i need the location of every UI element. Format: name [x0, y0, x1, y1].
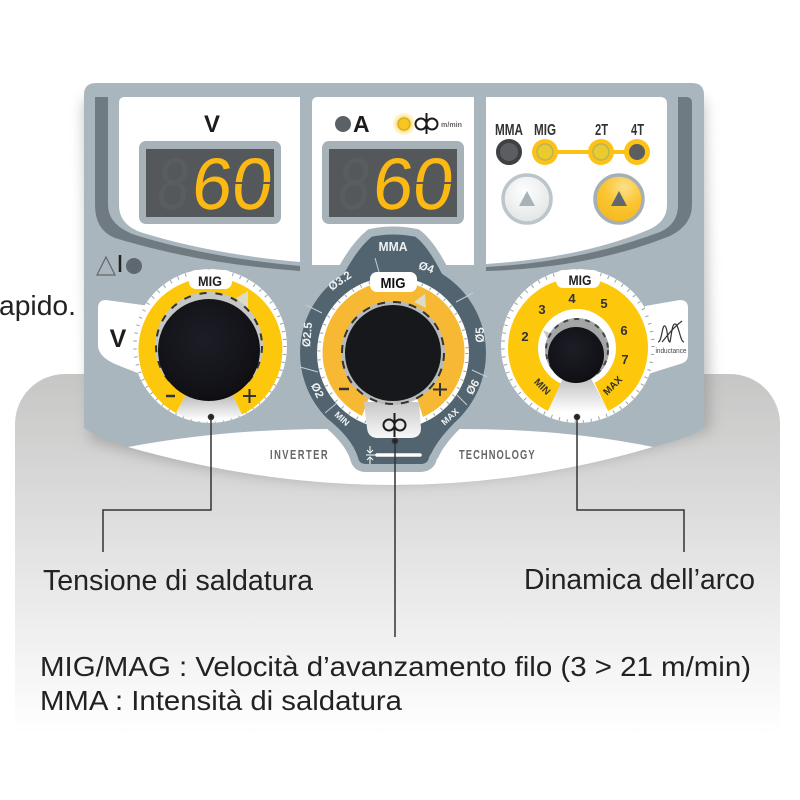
mode labels: 2T — [595, 122, 608, 139]
ampere indicator — [335, 116, 351, 132]
white button — [503, 175, 551, 223]
scale ticks — [135, 271, 285, 421]
connector line — [545, 150, 637, 154]
caption: voltage: Tensione di saldatura — [43, 565, 314, 597]
left display section — [119, 97, 300, 262]
bottom gap shading — [176, 350, 242, 422]
knob pointer — [414, 294, 426, 308]
knob — [158, 299, 260, 401]
warning indicator — [97, 255, 142, 275]
caption: arc dynamics: Dinamica dell’arco — [524, 564, 755, 596]
yellow sector — [508, 278, 648, 411]
label A: A — [353, 111, 370, 137]
mode section — [486, 97, 667, 264]
knob grip — [545, 318, 609, 382]
dial face — [133, 269, 287, 423]
control panel — [84, 83, 704, 485]
max label: MAX — [601, 374, 625, 398]
ghost digit: 8 — [153, 143, 194, 225]
display frame — [322, 141, 464, 224]
scale labels: MIN — [333, 410, 351, 428]
white lens — [128, 429, 653, 485]
cropped text fragment: apido. — [0, 290, 76, 321]
display screen — [329, 149, 457, 217]
middle display section — [312, 97, 474, 265]
current reading: 60 — [369, 143, 458, 225]
scale labels: Ø4 — [417, 260, 436, 277]
yellow sector — [138, 278, 282, 414]
left dark stripe — [95, 97, 300, 271]
knob pointer — [236, 291, 248, 310]
scale ticks — [319, 279, 467, 427]
led 2T — [588, 139, 614, 165]
display frame — [139, 141, 281, 224]
panel body — [84, 83, 704, 485]
right dark stripe — [486, 97, 692, 271]
yellow sector — [323, 281, 465, 417]
display screen — [146, 149, 274, 217]
icon: warning triangle — [97, 257, 115, 275]
led 4T — [624, 139, 650, 165]
caption: wire speed: MIG/MAG : Velocità d’avanzamento filo (3 > 21 m/min) — [40, 651, 751, 682]
yellow led — [398, 118, 410, 130]
voltage reading: 60 — [188, 143, 277, 225]
dial face — [317, 277, 469, 429]
mode notch — [556, 270, 600, 288]
bottom tab — [364, 402, 421, 438]
wire gauge bar — [377, 453, 420, 457]
min label: MIN — [531, 377, 552, 398]
white face — [312, 97, 474, 265]
right dial — [501, 269, 655, 423]
minus sign — [339, 388, 349, 390]
mode notch — [370, 272, 417, 292]
leader: arc dynamics — [574, 414, 684, 552]
icon: thermometer — [119, 255, 121, 272]
scale numbers: 3 — [538, 302, 546, 317]
scale labels: Ø3.2 — [327, 269, 354, 294]
icon: clamp arrows — [366, 446, 378, 464]
voltage tab — [98, 300, 150, 378]
center dial — [296, 230, 490, 468]
knob — [345, 305, 441, 401]
scale ticks — [503, 271, 653, 421]
inductance label: inductance — [656, 346, 686, 355]
tab shape — [645, 300, 688, 375]
background panel — [15, 374, 780, 774]
scale labels: Ø6 — [464, 378, 482, 397]
mode labels: MMA — [495, 122, 523, 139]
led glow — [395, 115, 413, 133]
knob — [548, 327, 604, 383]
label V: V — [204, 111, 220, 138]
mode label: MIG — [380, 275, 406, 292]
mode labels — [495, 122, 644, 139]
icon: wire diameter — [384, 413, 406, 437]
thermal led — [126, 258, 142, 274]
dial surround — [296, 230, 490, 468]
scale labels: Ø5 — [475, 327, 487, 343]
dial face — [501, 269, 655, 423]
led MIG — [532, 139, 558, 165]
mode label: MIG — [568, 272, 592, 288]
white face — [486, 97, 667, 264]
separators — [300, 258, 487, 413]
scale numbers: 5 — [600, 296, 608, 311]
technology label: TECHNOLOGY — [459, 449, 535, 462]
led MMA — [498, 141, 520, 163]
white face — [119, 97, 300, 262]
yellow button arrow — [611, 191, 627, 206]
unit label: m/min — [441, 122, 462, 129]
knob grip — [155, 292, 263, 400]
scale labels: Ø2 — [308, 381, 325, 400]
mode labels: 4T — [631, 122, 644, 139]
tab shape — [98, 300, 150, 378]
inductance tab — [645, 300, 688, 375]
mode labels: MIG — [534, 122, 556, 139]
mode notch — [189, 270, 232, 289]
leader: voltage — [103, 414, 214, 552]
tab label: V — [110, 325, 127, 353]
white button arrow — [519, 191, 535, 206]
minus sign — [166, 395, 175, 397]
left dial — [133, 269, 287, 423]
scale labels: MMA — [378, 239, 408, 254]
scale numbers: 4 — [568, 291, 576, 306]
bottom gap shading — [548, 350, 608, 420]
segment gap — [232, 182, 270, 184]
panel shadow — [84, 100, 710, 483]
yellow button — [595, 175, 643, 223]
ghost digit: 8 — [334, 143, 375, 225]
inner scale — [538, 309, 616, 387]
knob pointer — [543, 330, 552, 347]
mode label: MIG — [198, 273, 222, 289]
icon: wire diameter — [416, 113, 438, 134]
scale numbers: 7 — [621, 352, 629, 367]
scale labels — [301, 239, 487, 428]
caption: current: MMA : Intensità di saldatura — [40, 685, 402, 716]
inverter label: INVERTER — [270, 449, 328, 462]
icon: inductance curves — [658, 321, 684, 342]
plus sign — [433, 383, 447, 396]
scale numbers — [521, 291, 629, 367]
scale labels: Ø2.5 — [301, 321, 315, 348]
knob grip — [341, 301, 445, 405]
segment gap — [413, 182, 451, 184]
plus sign — [243, 389, 256, 403]
scale numbers: 2 — [521, 329, 529, 344]
scale numbers: 6 — [620, 323, 628, 338]
leader: wire speed — [392, 438, 398, 637]
scale labels: MAX — [439, 406, 461, 427]
